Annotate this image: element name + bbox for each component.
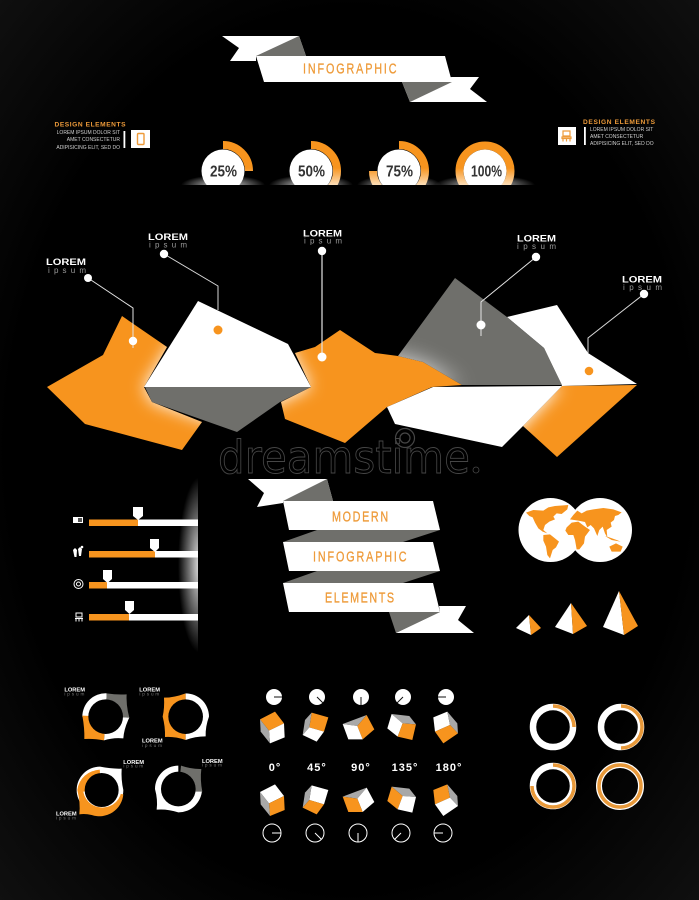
bottom cube 45 degrees bbox=[303, 785, 328, 814]
top cube 135 degrees bbox=[387, 714, 416, 740]
degree labels: 90° bbox=[351, 762, 371, 774]
ring captions: LOREM bbox=[202, 759, 223, 765]
left orange polygon bbox=[47, 316, 202, 450]
ring captions: ipsum bbox=[64, 691, 84, 696]
callout 4: ipsum bbox=[517, 242, 556, 251]
callout 5: LOREM bbox=[622, 274, 662, 284]
callout 3: ipsum bbox=[304, 236, 342, 246]
progress ring 50% bbox=[601, 706, 642, 748]
modern infographic ribbon: MODERN bbox=[332, 508, 388, 525]
upper right white polygon bbox=[507, 305, 637, 386]
ring captions: LOREM bbox=[139, 687, 161, 693]
bottom cube 90 degrees bbox=[343, 788, 374, 812]
top cube 90 degrees bbox=[343, 715, 374, 739]
top cube 180 degrees bbox=[433, 712, 458, 743]
degree labels bbox=[269, 762, 462, 774]
modern infographic ribbon: INFOGRAPHIC bbox=[313, 548, 407, 565]
right design elements note bbox=[558, 119, 656, 147]
right design elements note: ADIPISICING ELIT, SED DO bbox=[590, 141, 654, 147]
world map globes bbox=[518, 498, 632, 562]
callout 3 bbox=[303, 228, 342, 362]
ring group left bbox=[56, 687, 223, 820]
ring captions bbox=[56, 687, 223, 820]
dial 75%: 75% bbox=[386, 164, 413, 180]
bar chart glow bbox=[179, 481, 198, 650]
callout 2: ipsum bbox=[149, 240, 187, 250]
pyramid medium bbox=[555, 603, 587, 634]
ring captions: LOREM bbox=[123, 760, 145, 766]
rotation cubes bbox=[260, 712, 458, 816]
progress ring 25% bbox=[533, 706, 574, 747]
ring captions: ipsum bbox=[123, 764, 143, 769]
degree labels: 0° bbox=[269, 762, 281, 774]
ring captions: ipsum bbox=[56, 815, 76, 820]
white and grey gem bbox=[144, 301, 311, 432]
pyramid large bbox=[603, 591, 638, 635]
dial 25%: 25% bbox=[210, 164, 237, 180]
callout 2 bbox=[148, 232, 222, 334]
left design elements note: ADIPISICING ELIT, SED DO bbox=[56, 145, 120, 151]
ring captions: LOREM bbox=[142, 739, 163, 745]
callout 1 bbox=[46, 257, 137, 348]
dial 100% bbox=[460, 146, 510, 196]
top angle dials bbox=[266, 689, 454, 705]
ring captions: ipsum bbox=[139, 691, 159, 696]
callout 3: LOREM bbox=[303, 228, 342, 238]
centre orange polygon bbox=[281, 330, 462, 443]
ring C bbox=[77, 767, 123, 816]
callout 4: LOREM bbox=[517, 234, 556, 244]
top cube 0 degrees bbox=[260, 712, 285, 743]
top ribbon banner: INFOGRAPHIC bbox=[303, 60, 397, 77]
dial 50%: 50% bbox=[298, 164, 325, 180]
progress ring 100% bbox=[599, 765, 641, 807]
bottom cube 135 degrees bbox=[387, 787, 416, 813]
base glow under percent dials bbox=[182, 177, 533, 185]
modern infographic ribbon: ELEMENTS bbox=[325, 589, 394, 606]
bottom cube 0 degrees bbox=[260, 784, 285, 816]
bottom angle dials bbox=[263, 824, 452, 842]
callout 4 bbox=[476, 234, 556, 336]
progress bar 2 bbox=[73, 539, 198, 558]
left design elements note: DESIGN ELEMENTS bbox=[54, 122, 126, 128]
degree labels: 135° bbox=[392, 762, 418, 774]
progress bar 1 bbox=[73, 507, 198, 526]
callout 2: LOREM bbox=[148, 232, 188, 242]
callout 5: ipsum bbox=[623, 283, 662, 292]
left design elements note bbox=[54, 122, 150, 151]
modern infographic ribbon bbox=[248, 479, 474, 633]
dial 75% bbox=[373, 145, 425, 197]
left design elements note: LOREM IPSUM DOLOR SIT bbox=[57, 130, 120, 136]
progress bar 3 bbox=[74, 570, 198, 588]
callout 1: ipsum bbox=[48, 266, 86, 275]
bottom cube 180 degrees bbox=[433, 784, 458, 816]
watermark: dreamstime bbox=[218, 431, 470, 484]
progress bar 4 bbox=[75, 601, 198, 622]
dial 25% bbox=[202, 145, 249, 192]
ring B bbox=[163, 693, 209, 740]
ring D bbox=[155, 766, 202, 812]
progress ring 75% bbox=[532, 765, 574, 807]
callout 5 bbox=[585, 274, 662, 375]
ring captions: ipsum bbox=[202, 763, 222, 768]
top ribbon banner bbox=[222, 36, 487, 102]
right design elements note: LOREM IPSUM DOLOR SIT bbox=[590, 127, 653, 133]
ring A bbox=[82, 693, 129, 740]
upper grey polygon bbox=[398, 278, 562, 385]
left design elements note: AMET CONSECTETUR bbox=[67, 137, 120, 143]
right design elements note: AMET CONSECTETUR bbox=[590, 134, 644, 140]
degree labels: 45° bbox=[307, 762, 327, 774]
ring captions: LOREM bbox=[64, 687, 86, 693]
callout 1: LOREM bbox=[46, 257, 86, 267]
degree labels: 180° bbox=[436, 762, 462, 774]
lower white polygon bbox=[387, 386, 562, 447]
top cube 45 degrees bbox=[303, 713, 328, 742]
ring captions: LOREM bbox=[56, 811, 77, 817]
dial 50% bbox=[290, 145, 337, 197]
lower right orange polygon bbox=[523, 385, 637, 457]
dial 100%: 100% bbox=[471, 164, 502, 180]
pyramid small bbox=[516, 615, 541, 635]
ring captions: ipsum bbox=[142, 743, 162, 748]
right design elements note: DESIGN ELEMENTS bbox=[583, 119, 656, 126]
